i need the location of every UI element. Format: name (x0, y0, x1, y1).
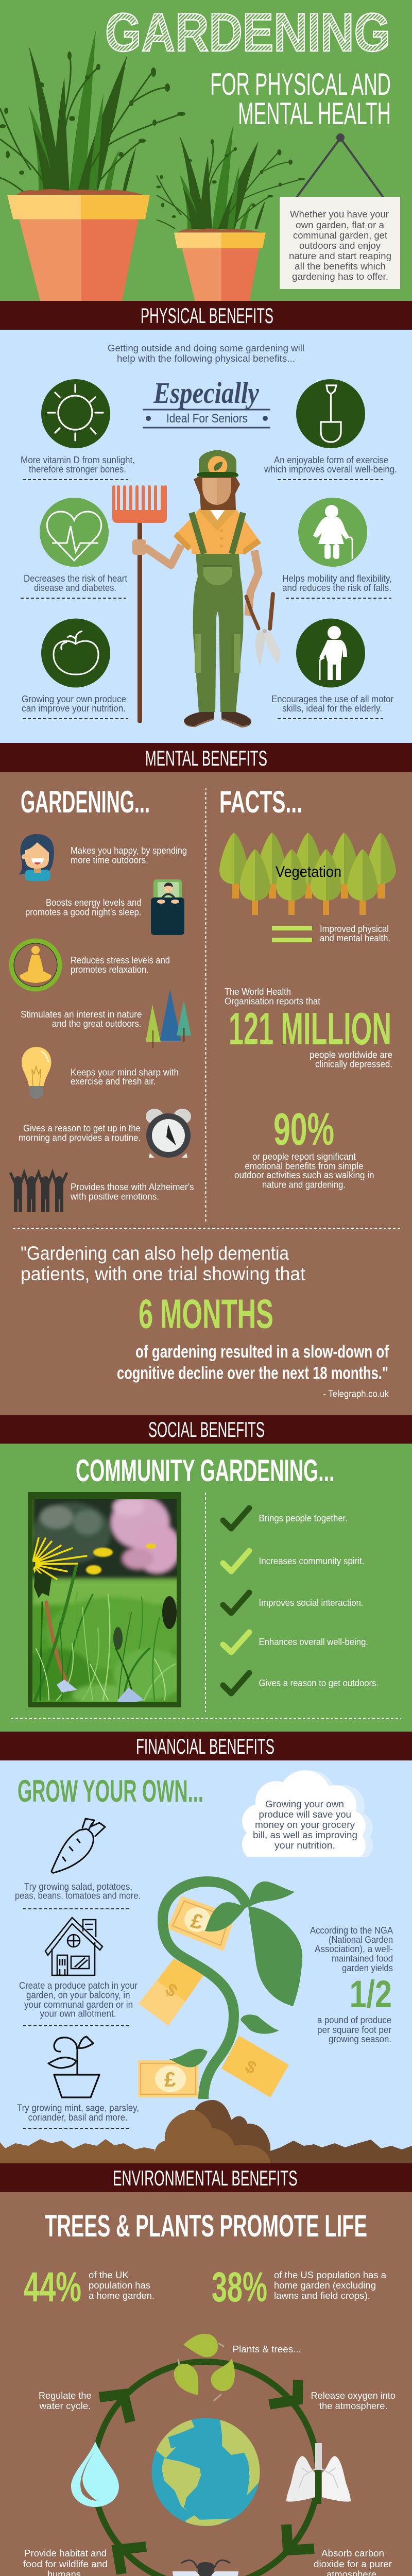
text: community list: Enhances overall well-being. (259, 1637, 368, 1647)
text: release oxygen (311, 2391, 396, 2411)
band: financial benefits: FINANCIAL BENEFITS (136, 1734, 274, 1758)
text: carbon: dioxide for a purer (314, 2559, 392, 2569)
text: nga: According to the NGA (310, 1925, 393, 1936)
text: emotional benefits: or people report significant (252, 1151, 356, 1162)
icon: large pot (7, 189, 150, 301)
text: motor skills (271, 694, 393, 714)
text: community list: Brings people together. (259, 1513, 348, 1523)
text: nature (21, 1009, 142, 1029)
icon: check 1 (223, 1508, 249, 1529)
icon: alarm clock (146, 1109, 191, 1158)
sign: intro note: gardening has to offer. (292, 272, 388, 282)
text: motor skills: Encourages the use of all motor (271, 694, 393, 704)
text: salad (15, 1882, 141, 1901)
text: carbon: Absorb carbon (321, 2548, 384, 2558)
icon: water drop (71, 2442, 119, 2507)
illustration: soil ground (0, 2100, 412, 2163)
icon: tree triplet (146, 989, 191, 1048)
badge: especially ideal for seniors (143, 376, 270, 429)
text: herbs: Try growing mint, sage, parsley, (17, 2103, 139, 2113)
icon: bee (173, 2560, 238, 2576)
text: improved health (320, 924, 390, 943)
text: mind: Keeps your mind sharp with (71, 1067, 179, 1078)
band: environmental benefits: ENVIRONMENTAL BENEFITS (113, 2166, 298, 2190)
text: alzheimers (70, 1182, 194, 1201)
text: routine: morning and provides a routine. (19, 1132, 141, 1143)
callout: cloud (242, 1770, 373, 1861)
text: energy (25, 897, 141, 917)
callout: cloud: your nutrition. (274, 1840, 335, 1851)
text: mobility (282, 573, 392, 593)
text: habitat: food for wildlife and (23, 2559, 108, 2569)
band: mental benefits: MENTAL BENEFITS (145, 746, 267, 770)
text: happy (71, 845, 187, 866)
text: improved health: Improved physical (320, 924, 389, 934)
text: emotional benefits: nature and gardening. (262, 1180, 346, 1190)
gardener: far arm (145, 545, 181, 565)
text: nga: maintained food (332, 1954, 393, 1964)
text: nga: Association), a well- (315, 1944, 393, 1954)
sign: intro note: all the benefits which (295, 261, 386, 272)
text: stress (71, 955, 170, 975)
text: mobility: Helps mobility and flexibility, (282, 573, 392, 584)
band: financial benefits (0, 1732, 412, 1760)
text: water cycle: water cycle. (39, 2401, 91, 2411)
text: salad: Try growing salad, potatoes, (24, 1882, 132, 1892)
text: physical intro (108, 343, 304, 364)
text: uk population: population has (89, 2280, 150, 2291)
text: herbs: coriander, basil and more. (28, 2112, 128, 2123)
text: plants and trees: Plants & trees... (233, 2344, 301, 2354)
badge: especially ideal for seniors: Especially (153, 376, 259, 410)
text: vitamin d (21, 455, 135, 474)
text: community list: Gives a reason to get outdoors. (259, 1678, 379, 1688)
text: community list (259, 1513, 379, 1688)
text: water cycle: Regulate the (39, 2391, 92, 2401)
text: stress: Reduces stress levels and (71, 955, 170, 965)
heading: gardening: GARDENING... (21, 785, 150, 819)
text: happy: more time outdoors. (71, 855, 148, 866)
icon: leaves (174, 2334, 235, 2401)
text: uk population: of the UK (89, 2270, 129, 2280)
text: nutrition: Growing your own produce (22, 694, 126, 704)
stat: 6 months: 6 MONTHS (139, 1291, 273, 1337)
quote: dementia trial: - Telegraph.co.uk (323, 1389, 389, 1399)
illustration: money notes: £ (164, 2069, 176, 2091)
illustration: vegetation trees (219, 833, 396, 915)
panel: physical benefits (0, 330, 412, 743)
icon: check 5 (223, 1673, 249, 1693)
text: produce patch: your own allotment. (40, 2008, 116, 2019)
text: us population (274, 2270, 387, 2301)
text: us population: home garden (excluding (274, 2280, 376, 2291)
stat: 38 percent: 38% (212, 2264, 267, 2311)
text: herbs (17, 2103, 139, 2123)
text: habitat (23, 2548, 108, 2576)
text: vitamin d: therefore stronger bones. (29, 464, 126, 474)
sign: intro note (280, 133, 400, 289)
illustration: vegetation trees: Vegetation (276, 863, 341, 880)
text: nature: and the great outdoors. (52, 1019, 141, 1029)
text: nutrition (22, 694, 126, 714)
panel: hero header (0, 0, 412, 301)
text: energy: Boosts energy levels and (46, 897, 141, 908)
icon: large plant (0, 30, 185, 192)
gardener: hand on rake (132, 539, 146, 555)
sign: intro note: communal garden, get (293, 230, 387, 241)
band: mental benefits (0, 743, 412, 772)
text: uk population (89, 2270, 154, 2301)
text: who report: Organisation reports that (225, 996, 320, 1007)
subtitle (210, 67, 391, 131)
illustration: money plant (163, 1882, 302, 2099)
sign: intro note: own garden, flat or a (296, 220, 385, 230)
icon: meditation (11, 941, 60, 989)
text: produce patch (19, 1980, 138, 2019)
gardener: hair (194, 477, 240, 510)
band: environmental benefits (0, 2163, 412, 2192)
photo: dandelions in grass (21, 1492, 187, 1707)
text: salad: peas, beans, tomatoes and more. (15, 1891, 141, 1901)
illustration: money notes: £ (188, 1909, 205, 1934)
text: habitat: Provide habitat and (24, 2548, 107, 2558)
text: pound of produce (317, 2015, 391, 2044)
icon: earth (151, 2418, 260, 2526)
icon: elderly woman (298, 498, 367, 567)
diagram: cycle ring (94, 2362, 318, 2576)
icon: check 2 (223, 1551, 249, 1571)
text: exercise: which improves overall well-being. (264, 464, 397, 474)
gardener: shoes (184, 712, 251, 727)
text: mind (71, 1067, 179, 1087)
text: uk population: a home garden. (89, 2291, 154, 2301)
icon: happy woman (19, 834, 54, 881)
gardener: cap (197, 450, 238, 477)
icon: house (45, 1918, 102, 1975)
text: carbon (314, 2548, 392, 2576)
quote: dementia trial: patients, with one trial showing that (21, 1263, 306, 1284)
icon: apple (41, 618, 110, 687)
heading: grow your own: GROW YOUR OWN... (18, 1774, 203, 1808)
text: emotional benefits (234, 1151, 374, 1190)
sign: intro note: Whether you have your (290, 209, 389, 219)
panel: social benefits (11, 1459, 401, 1719)
text: release oxygen: the atmosphere. (319, 2401, 387, 2411)
stat: 90 percent: 90% (273, 1104, 334, 1155)
text: motor skills: skills, ideal for the elderly. (282, 703, 382, 714)
text: routine (19, 1123, 141, 1143)
text: emotional benefits: emotional benefits from simple (245, 1161, 364, 1172)
icon: small plant (156, 126, 305, 229)
text: physical intro: help with the following physical benefits... (117, 353, 295, 364)
text: pound of produce: growing season. (329, 2034, 391, 2044)
sign: intro note: nature and start reaping (289, 251, 391, 261)
icon: check 4 (223, 1632, 249, 1652)
panel: environmental benefits (0, 2192, 412, 2576)
illustration: gardener (132, 450, 261, 727)
icon: equals sign (272, 926, 312, 942)
illustration: rake (112, 485, 167, 723)
callout: cloud: bill, as well as improving (253, 1830, 357, 1840)
gardener: overalls (193, 554, 243, 712)
icon: light bulb (22, 1047, 52, 1099)
sign: intro note: outdoors and enjoy (299, 241, 381, 251)
band: physical benefits (0, 301, 412, 330)
text: release oxygen: Release oxygen into (311, 2391, 396, 2401)
text: alzheimers: Provides those with Alzheimer's (71, 1182, 194, 1192)
text: mobility: and reduces the risk of falls. (282, 583, 391, 593)
illustration: money notes (138, 1896, 289, 2097)
quote: dementia trial (21, 1243, 389, 1399)
text: community list: Increases community spirit. (259, 1556, 365, 1566)
text: happy: Makes you happy, by spending (71, 845, 187, 856)
icon: sleeping person (151, 879, 184, 935)
icon: carrot (52, 1819, 105, 1873)
text: nga: garden yields (342, 1963, 393, 1973)
text: nga: (National Garden (329, 1935, 393, 1945)
text: us population: of the US population has a (274, 2270, 387, 2280)
illustration: shears (246, 594, 281, 666)
text: heart disease (24, 573, 127, 593)
text: energy: promotes a good night's sleep. (25, 907, 141, 917)
icon: elderly man (296, 618, 365, 687)
panel: mental benefits (0, 772, 412, 1415)
quote: dementia trial: "Gardening can also help dementia (21, 1243, 289, 1264)
text: produce patch: Create a produce patch in your (19, 1980, 138, 1991)
icon: lungs (286, 2443, 351, 2504)
gardener: shirt (174, 504, 261, 555)
callout: cloud: money on your grocery (255, 1820, 355, 1830)
band: social benefits (0, 1415, 412, 1444)
text: pound of produce: a pound of produce (317, 2015, 391, 2025)
icon: shovel (296, 379, 365, 448)
text: heart disease: Decreases the risk of heart (24, 573, 127, 584)
icon: people with raised arms (10, 1173, 67, 1212)
gardener: near arm (248, 550, 259, 616)
text: nature: Stimulates an interest in nature (21, 1009, 142, 1020)
text: mind: exercise and fresh air. (71, 1076, 156, 1087)
illustration: money notes: $ (162, 1979, 181, 2001)
text: pound of produce: per square foot per (317, 2025, 391, 2035)
callout: cloud: Growing your own (265, 1799, 344, 1809)
band: social benefits: SOCIAL BENEFITS (148, 1417, 265, 1442)
icon: seedling pot (48, 2037, 99, 2097)
text: clinically depressed: people worldwide are (310, 1050, 392, 1060)
heading: facts: FACTS... (219, 785, 302, 819)
icon: heart with pulse (40, 498, 109, 567)
text: clinically depressed (310, 1050, 392, 1070)
icon: small pot (174, 229, 266, 301)
icon: sun (41, 379, 110, 448)
text: exercise: An enjoyable form of exercise (274, 455, 388, 465)
text: emotional benefits: outdoor activities such as walking in (234, 1170, 374, 1180)
callout: cloud: produce will save you (259, 1809, 351, 1820)
stat: one half: 1/2 (350, 1973, 392, 2015)
text: who report: The World Health (225, 987, 291, 997)
illustration: money notes: $ (242, 2056, 260, 2078)
text: produce patch: garden, on your balcony, in (26, 1990, 130, 2000)
text: nga (310, 1925, 393, 1973)
text: water cycle (39, 2391, 92, 2411)
text: alzheimers: with positive emotions. (70, 1191, 159, 1201)
gardener: face (202, 478, 231, 505)
text: improved health: and mental health. (320, 933, 390, 943)
text: community list: Improves social interaction. (259, 1598, 364, 1608)
stat: 44 percent: 44% (24, 2264, 81, 2311)
text: who report (225, 987, 320, 1007)
text: stress: promotes relaxation. (71, 964, 149, 975)
badge: especially ideal for seniors: Ideal For Seniors (166, 412, 248, 426)
icon: check 3 (223, 1592, 249, 1613)
text: clinically depressed: clinically depressed. (315, 1059, 392, 1070)
text: exercise (264, 455, 397, 474)
text: vitamin d: More vitamin D from sunlight, (21, 455, 135, 465)
text: physical intro: Getting outside and doing some gardening will (108, 343, 304, 353)
text: us population: lawns and field crops). (274, 2291, 370, 2301)
panel: financial benefits (0, 1760, 412, 2163)
text: heart disease: disease and diabetes. (34, 583, 116, 593)
text: nutrition: can improve your nutrition. (22, 703, 126, 714)
text: routine: Gives a reason to get up in the (23, 1123, 141, 1133)
band: physical benefits: PHYSICAL BENEFITS (141, 303, 273, 328)
text: produce patch: your communal garden or in (24, 1999, 133, 2010)
